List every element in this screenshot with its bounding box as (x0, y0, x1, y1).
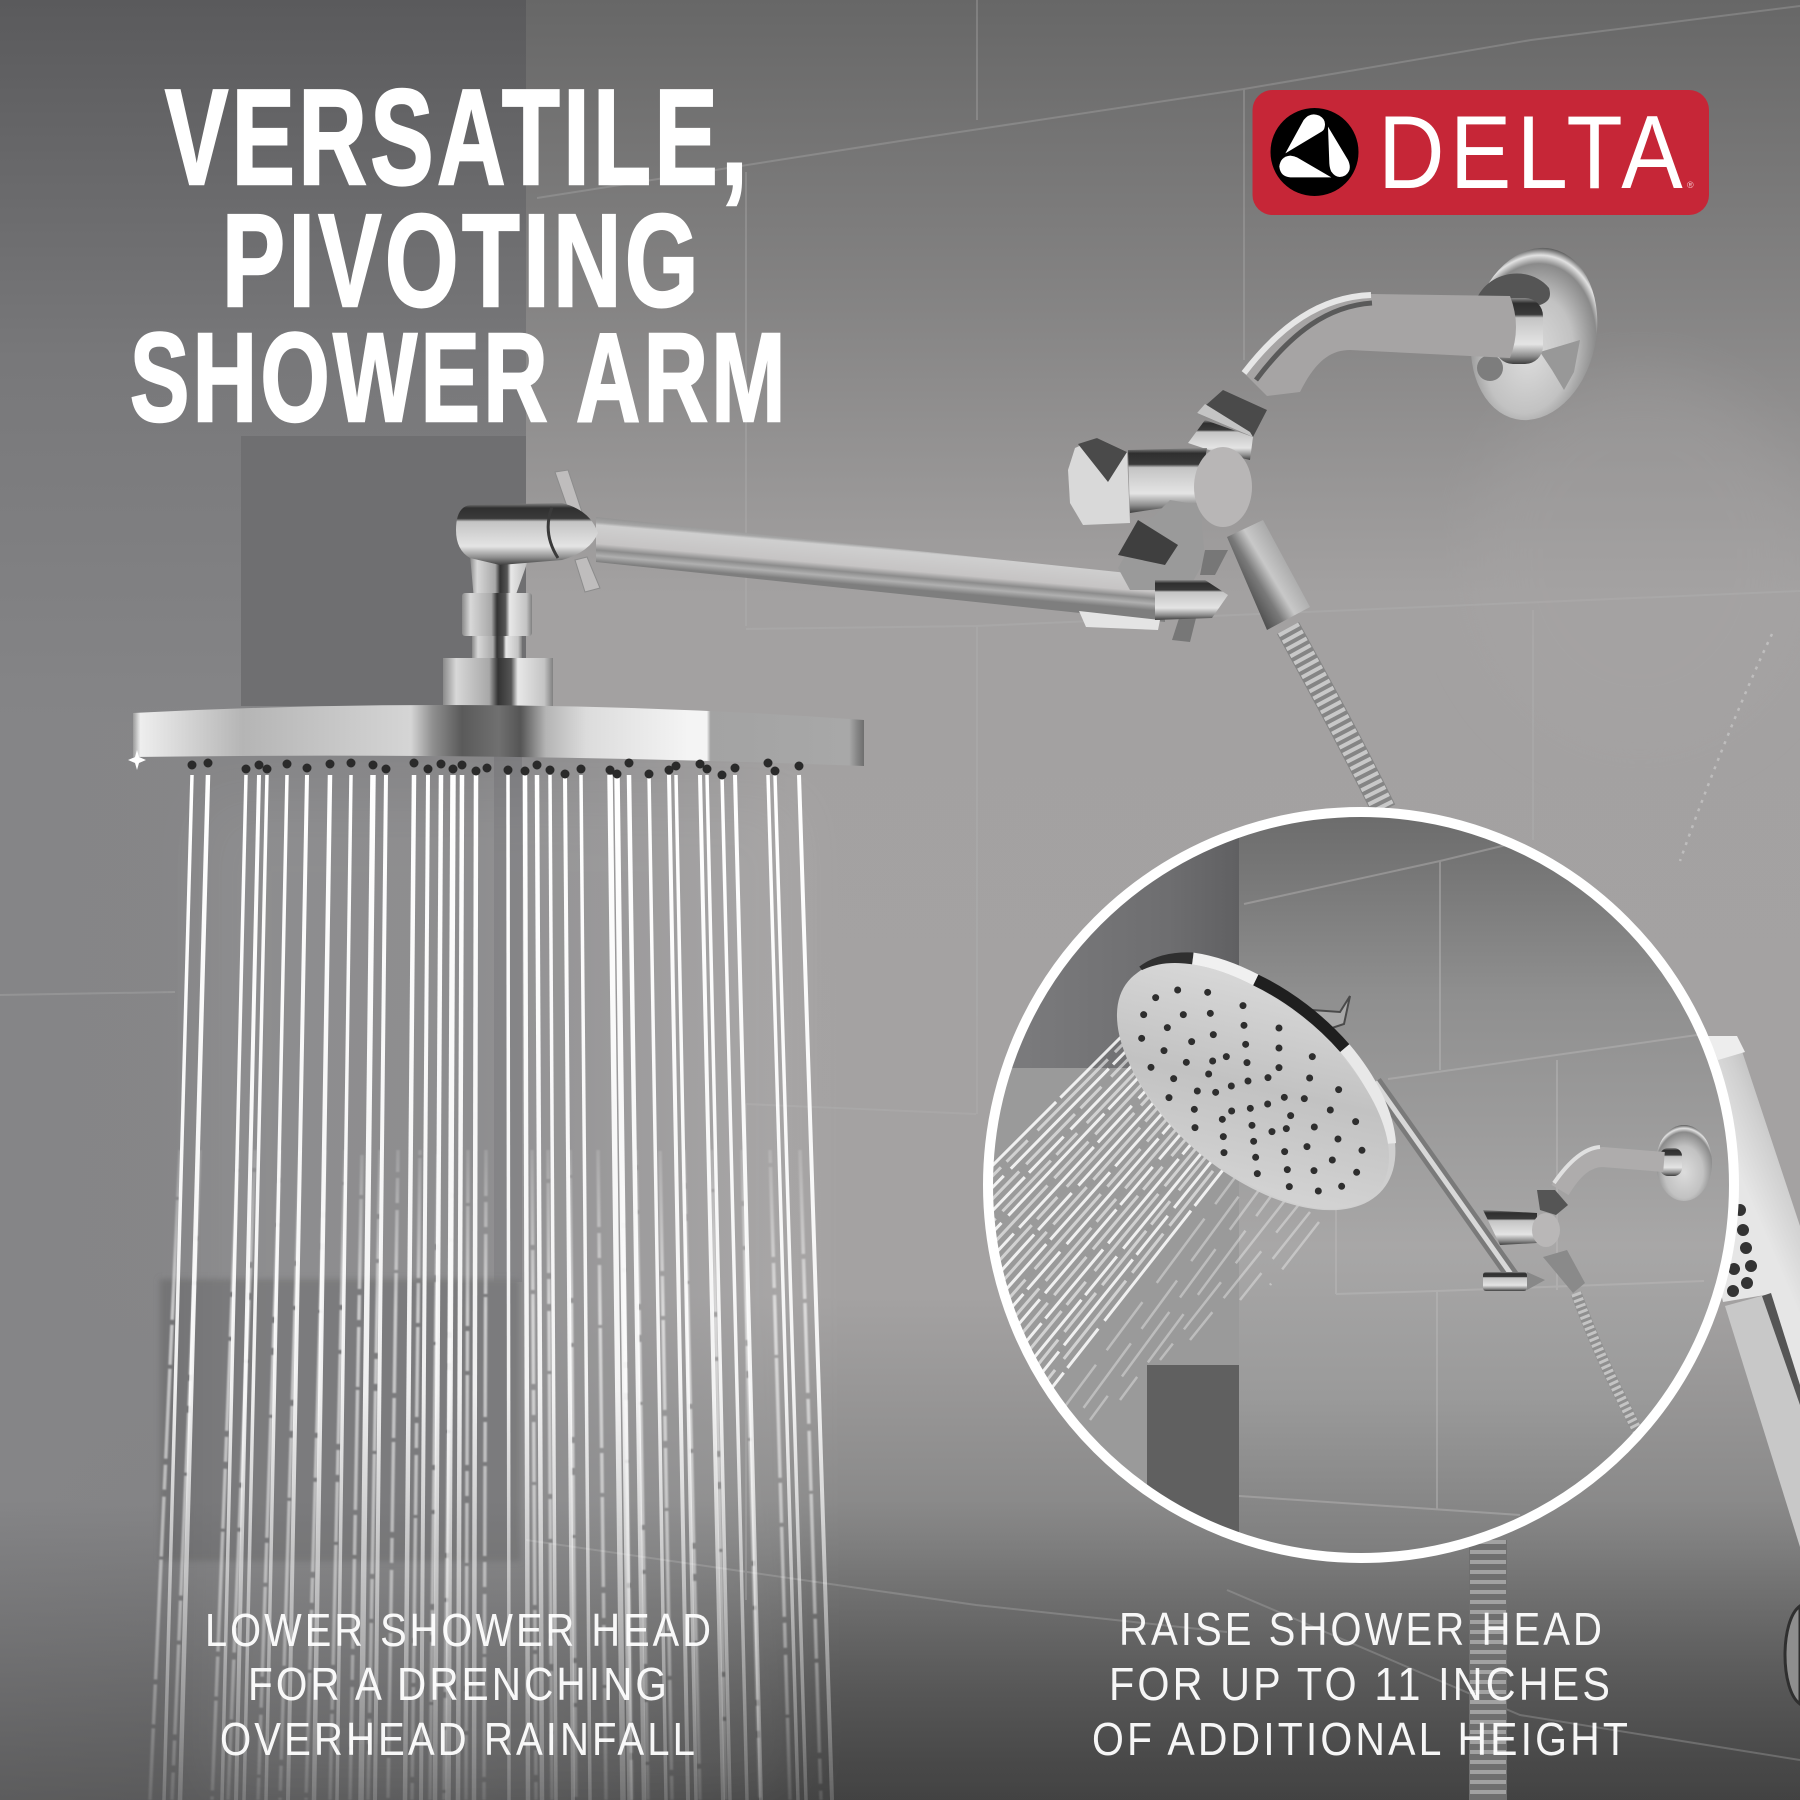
caption: lower shower head: LOWER SHOWER HEAD (205, 1604, 714, 1656)
water droplets on the right wall (1680, 634, 1772, 861)
inset head chrome rim (1139, 952, 1396, 1144)
inset head outer edge (1132, 958, 1396, 1210)
rim sparkle (128, 750, 146, 770)
lower hose below inset (1469, 1540, 1507, 1800)
inset wall flange and arm (1554, 1125, 1712, 1201)
inset hose (1576, 1293, 1640, 1436)
shower disc rim (133, 705, 864, 766)
inset long arm (1375, 1082, 1513, 1277)
handheld lower handle (1725, 1295, 1800, 1547)
caption: raise shower head: OF ADDITIONAL HEIGHT (1092, 1713, 1631, 1765)
inset diverter (1483, 1190, 1585, 1293)
handheld shower behind inset (1700, 1036, 1800, 1547)
swivel elbow (456, 503, 598, 600)
title: VERSATILE, (165, 61, 751, 213)
wall flange (1455, 236, 1613, 432)
inset tiled wall (980, 800, 1740, 1570)
caption: raise shower head: RAISE SHOWER HEAD (1119, 1603, 1605, 1655)
logo mark (1270, 108, 1358, 196)
handheld spray holes (1733, 1210, 1751, 1291)
caption: lower shower head: OVERHEAD RAINFALL (220, 1713, 698, 1765)
hose holder at bottom edge (1785, 1606, 1800, 1704)
diverter body (1068, 438, 1252, 590)
logo wordmark: DELTA (1378, 95, 1688, 211)
long pivoting shower arm (596, 517, 1165, 630)
flexible hose (1288, 628, 1384, 810)
rain shower head with neck and swivel (128, 470, 864, 775)
swivel cross knob (555, 470, 600, 592)
Delta logo badge (1252, 90, 1709, 215)
wall-mounted shower arm and diverter (1068, 236, 1613, 810)
handheld upper body (1700, 1036, 1800, 1402)
arm clamp knob (1155, 550, 1228, 642)
inset wing nut (1312, 996, 1350, 1028)
title (130, 61, 789, 448)
handheld cap (1708, 1036, 1745, 1060)
caption: raise shower head: FOR UP TO 11 INCHES (1109, 1658, 1613, 1710)
registered mark: ® (1687, 180, 1694, 190)
rainfall water streaks (150, 775, 832, 1800)
neck connector (462, 593, 532, 658)
spray nozzles (192, 763, 799, 775)
hose connector cone (1227, 520, 1310, 630)
inset spray holes (1142, 990, 1362, 1191)
neck collar (443, 658, 553, 706)
inset water spray (993, 1036, 1320, 1420)
inset head face (1117, 963, 1388, 1148)
caption: raise shower head (1092, 1603, 1631, 1765)
title: SHOWER ARM (130, 307, 789, 448)
inset circle: raised shower head (983, 807, 1739, 1563)
caption: lower shower head: FOR A DRENCHING (248, 1658, 670, 1710)
hex nut (1188, 390, 1267, 460)
handle dark stripe (1762, 1293, 1800, 1405)
caption: lower shower head (205, 1604, 714, 1765)
title: PIVOTING (222, 187, 702, 334)
curved wall arm (1244, 294, 1516, 396)
inset shower head (1117, 952, 1396, 1210)
